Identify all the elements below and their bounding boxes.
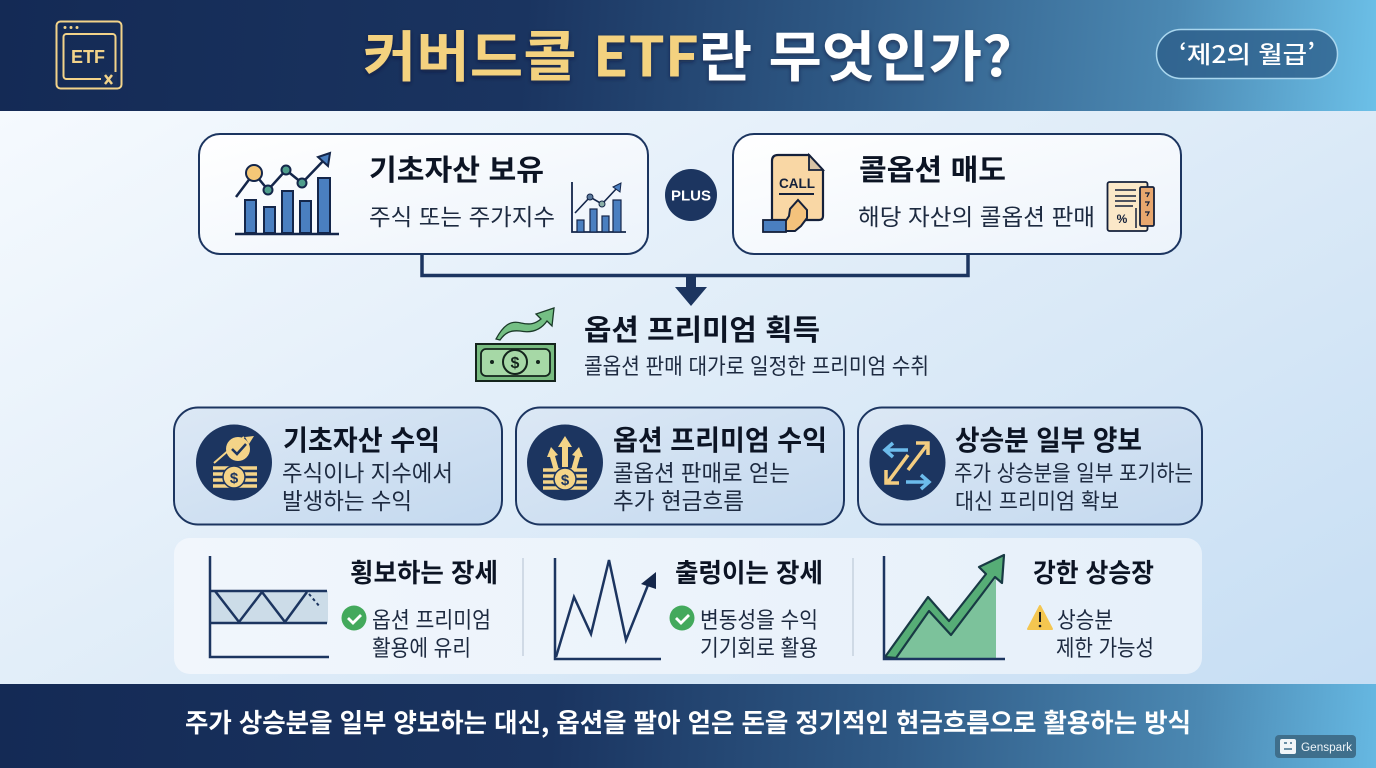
panel: giving up upside [858, 408, 1202, 524]
panel: option premium return [516, 408, 844, 524]
heading: 횡보하는 장세 [350, 553, 498, 590]
icon: exchange arrows [870, 424, 946, 500]
text block: 주식 또는 주가지수 [369, 198, 555, 232]
panel: option premium [476, 307, 929, 381]
text block: 발생하는 수익 [282, 482, 412, 516]
badge: second salary: ‘제2의 월급’ [1179, 35, 1315, 70]
badge: second salary [1156, 30, 1338, 78]
text block: 옵션 프리미엄 [372, 603, 491, 635]
panel: selling call option [733, 134, 1181, 254]
text block: 주가 상승분을 일부 포기하는 [954, 456, 1193, 488]
text block: 대신 프리미엄 확보 [955, 484, 1119, 516]
text block: 콜옵션 판매 대가로 일정한 프리미엄 수취 [584, 349, 929, 381]
arrow: connector into premium [422, 254, 968, 306]
icon: ETF window: ETF [71, 47, 105, 67]
heading: 상승분 일부 양보 [955, 419, 1142, 459]
icon: coins with up arrows [527, 424, 603, 500]
text block: 제한 가능성 [1056, 631, 1154, 663]
badge: plus [665, 169, 717, 221]
badge: Genspark: Genspark [1301, 742, 1352, 754]
heading: 옵션 프리미엄 획득 [584, 307, 820, 349]
footer band [0, 684, 1376, 768]
text block [282, 454, 453, 516]
icon: term sheet: % [1117, 212, 1128, 226]
icon: coins with check: $ [230, 470, 239, 487]
icon: money with rising arrow [476, 308, 555, 381]
icon: check [670, 606, 694, 630]
badge: plus: PLUS [671, 188, 711, 204]
heading: 기초자산 보유 [369, 147, 544, 189]
text block: 콜옵션 판매로 얻는 [613, 454, 790, 488]
text block [700, 603, 818, 663]
text block [1056, 603, 1154, 663]
text block: 추가 현금흐름 [613, 482, 744, 516]
chart: strong bull market [884, 555, 1005, 659]
heading: 콜옵션 매도 [859, 147, 1006, 189]
header band [0, 0, 1376, 111]
text block [954, 456, 1193, 516]
footer summary text: 주가 상승분을 일부 양보하는 대신, 옵션을 팔아 얻은 돈을 정기적인 현금흐름으로 활용하는 방식 [185, 703, 1191, 740]
icon: growth bar chart [235, 153, 339, 234]
text block: 해당 자산의 콜옵션 판매 [858, 198, 1095, 232]
icon: coins with check [196, 424, 272, 500]
text block [613, 454, 790, 516]
title: 커버드콜 ETF 란 무엇인가? [363, 12, 1012, 92]
badge: Genspark [1275, 735, 1356, 758]
panel: market scenarios [174, 538, 1202, 674]
icon: ETF window [56, 22, 122, 88]
chart: sideways market [210, 556, 329, 657]
heading: 강한 상승장 [1033, 553, 1154, 590]
panel: underlying asset return [174, 408, 502, 524]
icon: small bar chart [572, 182, 626, 232]
text block: 변동성을 수익 [700, 603, 818, 635]
icon: warning [1028, 606, 1052, 629]
icon: money with rising arrow: $ [511, 355, 520, 372]
chart: volatile market [555, 558, 661, 659]
icon: call document with hand [763, 155, 823, 232]
icon: check [342, 606, 366, 630]
text block: 기기회로 활용 [700, 631, 818, 663]
text block: 주식이나 지수에서 [282, 454, 453, 488]
text block [372, 603, 491, 663]
icon: call document with hand: CALL [779, 176, 815, 191]
text block: 상승분 [1057, 603, 1113, 635]
heading: 기초자산 수익 [283, 419, 440, 459]
panel: holding underlying asset [199, 134, 648, 254]
heading: 출렁이는 장세 [675, 553, 823, 590]
heading: 옵션 프리미엄 수익 [613, 419, 827, 459]
text block: 활용에 유리 [372, 631, 471, 663]
icon: coins with up arrows: $ [561, 472, 570, 489]
icon: term sheet [1108, 182, 1154, 231]
